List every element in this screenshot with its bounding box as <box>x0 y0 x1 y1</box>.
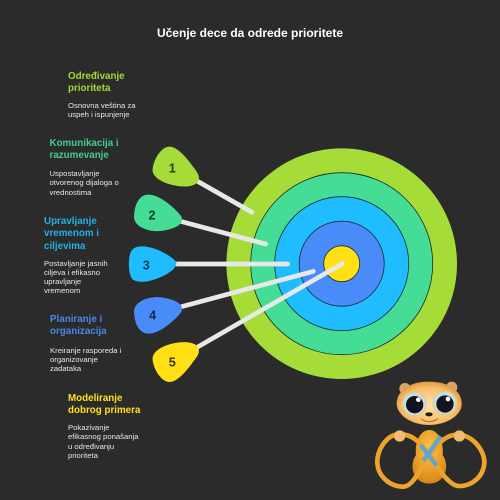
darts <box>129 147 342 382</box>
block 4 heading <box>50 314 107 337</box>
block 5 description: prioriteta <box>68 451 98 460</box>
infinity loop <box>377 434 484 487</box>
block 5 heading: Modeliranje <box>68 392 122 404</box>
nose and smile <box>425 412 433 416</box>
block 3 description <box>44 258 108 295</box>
ears <box>399 382 457 394</box>
dart 1: 1 <box>169 161 176 175</box>
head <box>397 382 462 425</box>
block 3 description: vremenom <box>44 286 80 295</box>
block 5 heading: dobrog primera <box>68 405 140 416</box>
mascot <box>377 382 484 487</box>
block 3 description: upravljanje <box>44 277 81 286</box>
block 1 heading <box>68 70 125 94</box>
dart 1 <box>153 147 252 212</box>
dart 2: 2 <box>148 208 156 222</box>
block 5 description <box>68 423 139 460</box>
block 5 description: efikasnog ponašanja <box>68 432 139 441</box>
block 1 heading: prioriteta <box>68 83 110 94</box>
block 3 description: Postavljanje jasnih <box>44 258 108 268</box>
block 2 heading: Komunikacija i <box>50 138 119 148</box>
block 3 heading <box>44 216 99 252</box>
block 5 description: Pokazivanje <box>68 423 109 432</box>
block 2 heading: razumevanje <box>50 150 109 161</box>
hands <box>394 430 405 442</box>
block 2 description <box>50 169 119 197</box>
dart 3: 3 <box>143 258 150 272</box>
dart 4: 4 <box>149 308 156 322</box>
title: Učenje dece da odrede prioritete <box>157 26 343 40</box>
block 2 description: vrednostima <box>50 188 91 197</box>
block 2 heading <box>50 138 119 161</box>
block 5 description: u određivanju <box>68 442 114 451</box>
block 4 heading: organizacija <box>50 326 107 337</box>
eyes <box>402 392 427 416</box>
block 4 heading: Planiranje i <box>50 314 102 324</box>
dart 3 <box>129 246 288 282</box>
dart 5: 5 <box>169 355 176 369</box>
block 2 description: Uspostavljanje <box>50 169 100 178</box>
block 3 heading: ciljevima <box>44 241 85 252</box>
block 4 description: zadataka <box>50 364 81 373</box>
block 1 description <box>68 100 136 119</box>
block 4 description: organizovanje <box>50 355 98 364</box>
block 1 description: Osnovna veština za <box>68 100 136 110</box>
blue strap <box>421 436 441 466</box>
body <box>412 430 446 484</box>
target <box>226 148 457 379</box>
block 5 heading <box>68 392 140 416</box>
block 1 description: uspeh i ispunjenje <box>68 110 130 119</box>
block 2 description: otvorenog dijaloga o <box>50 178 119 187</box>
dart 2 <box>134 195 266 244</box>
dart 4 <box>134 271 313 334</box>
dart 5 <box>153 264 342 382</box>
block 4 description <box>50 346 121 373</box>
block 3 heading: Upravljanje <box>44 216 97 227</box>
block 3 heading: vremenom i <box>44 228 99 239</box>
block 4 description: Kreiranje rasporeda i <box>50 346 121 354</box>
block 1 heading: Određivanje <box>68 70 125 82</box>
block 3 description: ciljeva i efikasno <box>44 268 100 277</box>
